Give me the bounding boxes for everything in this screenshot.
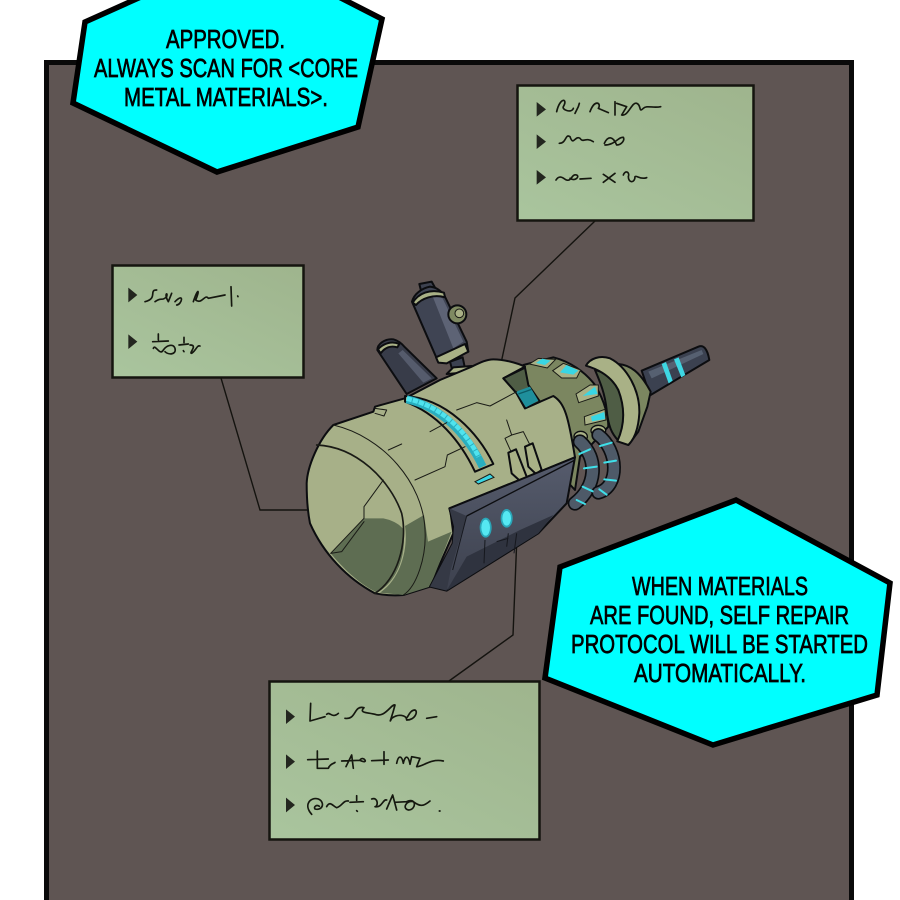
callout text: when materials: WHEN MATERIALS [632,571,808,601]
upper left canister [377,339,437,394]
upper canister with valve [412,282,472,374]
main hull [307,359,575,595]
callout: self repair [545,500,890,745]
leader lines [221,221,595,681]
rear flange [586,357,651,445]
rear body with light slots [523,357,608,490]
callout text: always scan: ALWAYS SCAN FOR <CORE [94,53,358,83]
note panel: left [112,266,304,378]
device illustration [307,282,709,595]
rear shaft with cyan rings [642,346,709,395]
hull shading [331,515,452,595]
dark side armour with lights [430,457,575,591]
note panel: top right [518,86,754,220]
fins [508,443,542,482]
callout text: approved: APPROVED. [166,24,285,54]
hull slot with teal block [503,368,540,408]
hull line work [317,392,533,595]
note panel: bottom [270,682,540,840]
callout text: automatically: AUTOMATICALLY. [634,658,806,688]
cyan arc gauge [405,396,494,484]
callout: approved [73,0,382,172]
callout text: metal materials: METAL MATERIALS>. [124,82,328,112]
coiled hoses [574,425,616,504]
